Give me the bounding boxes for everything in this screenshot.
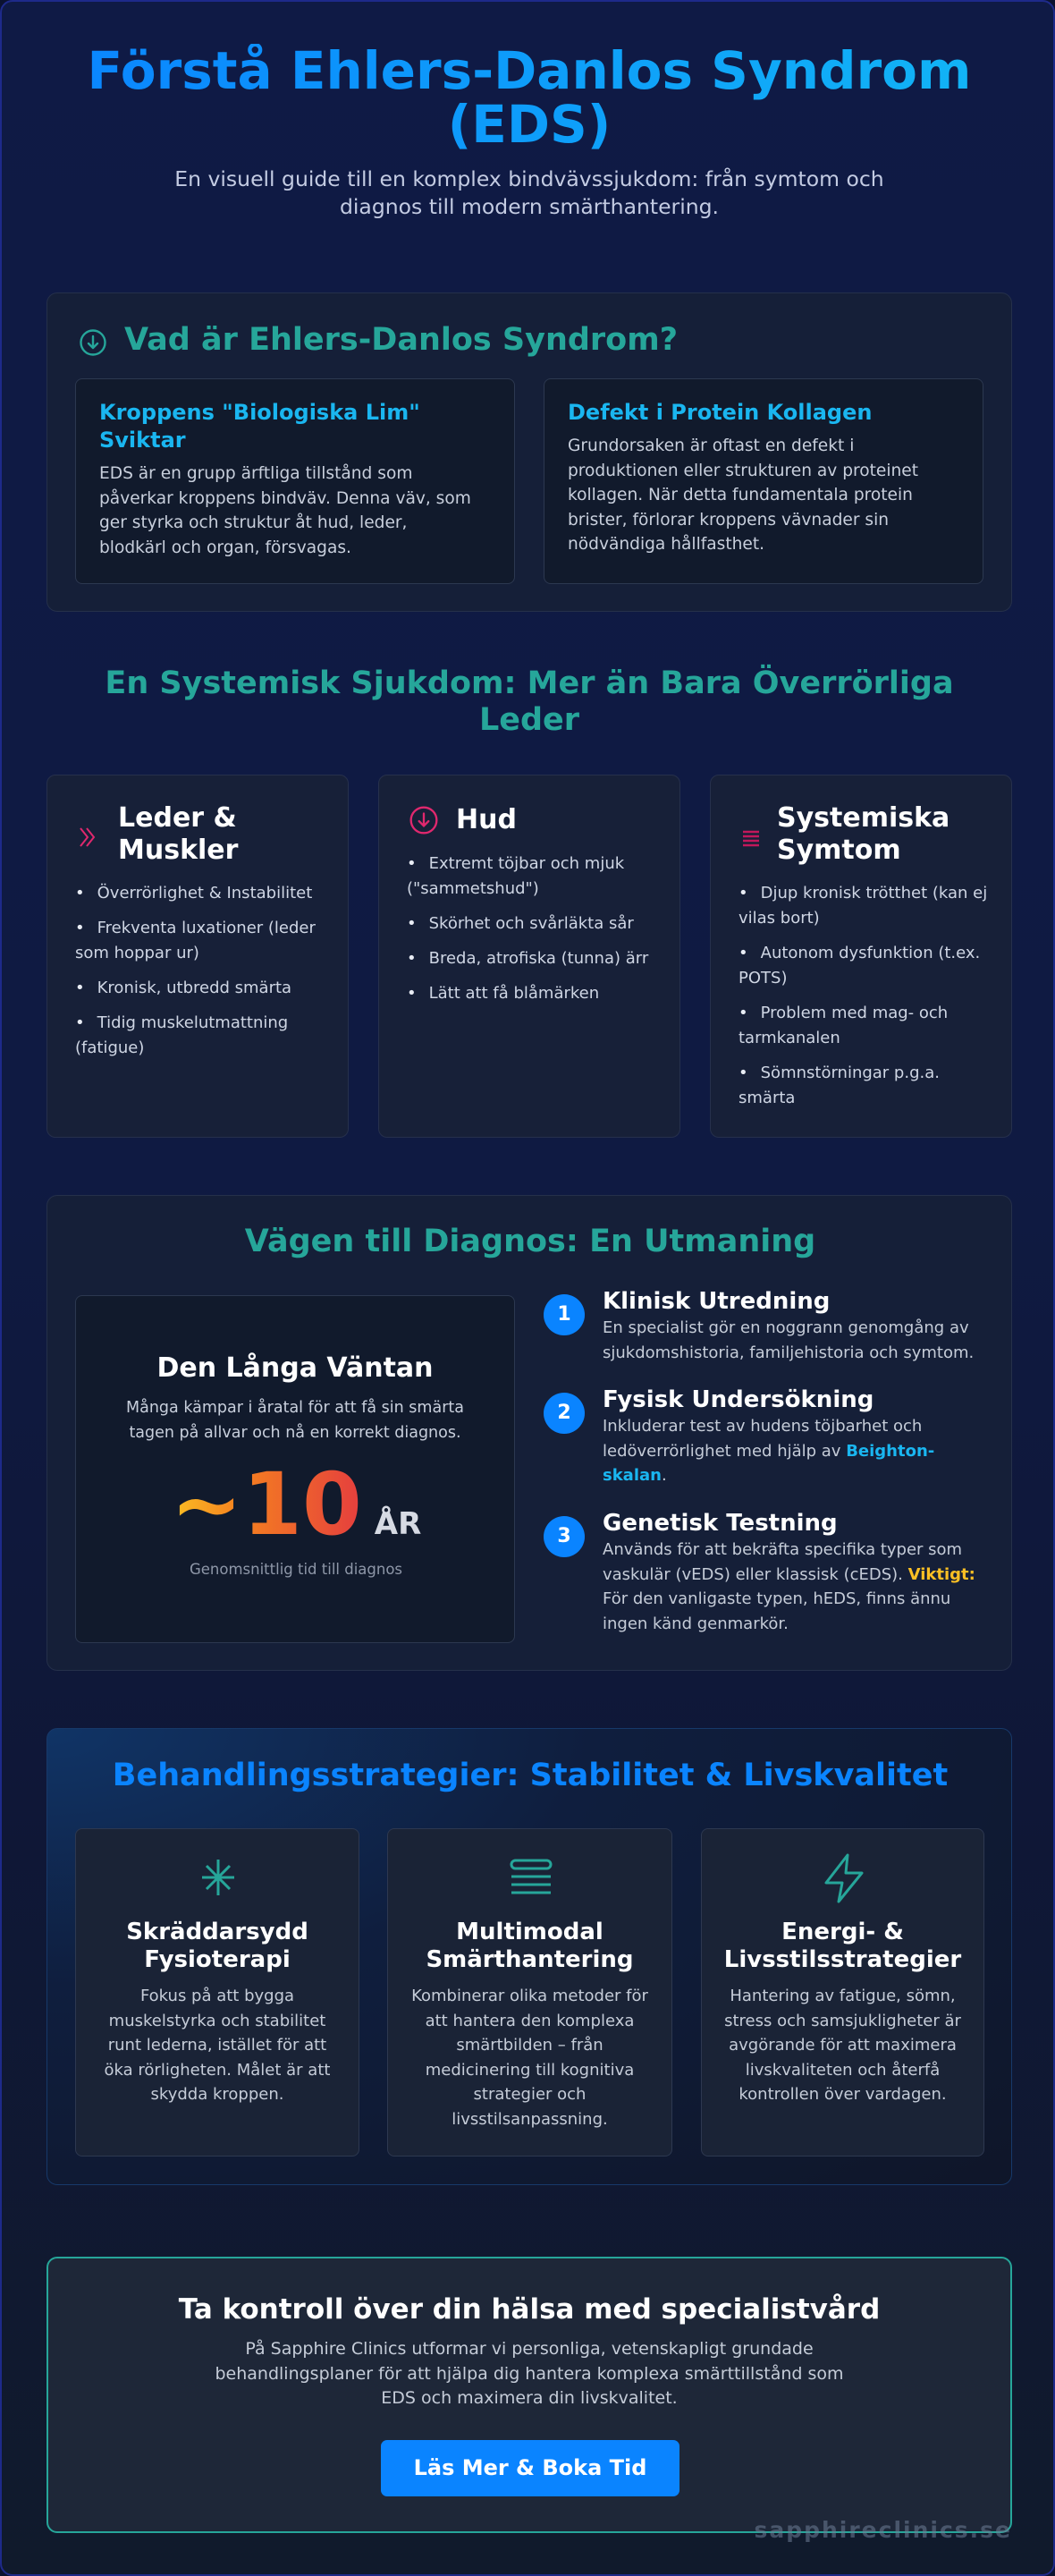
step 1: [544, 1288, 974, 1361]
list: systemic: Autonom dysfunktion (t.ex. POTS): [738, 944, 980, 987]
icon: circle arrow: [80, 329, 106, 356]
card: physiotherapy: [75, 1828, 359, 2157]
list: systemic: Sömnstörningar p.g.a. smärta: [738, 1063, 940, 1107]
step 2: 2: [557, 1402, 571, 1424]
step 3: Används för att bekräfta specifika typer som vaskulär (vEDS) eller klassisk (cEDS). Viktigt: För den vanligaste typen, hEDS, finns ännu ingen känd genmarkör.: [603, 1540, 975, 1633]
card: multimodal: [387, 1828, 672, 2157]
step 1: Klinisk Utredning: [603, 1288, 830, 1315]
heading: systemic disease: En Systemisk Sjukdom: Mer än Bara Överrörliga Leder: [105, 665, 954, 738]
panel: diagnosis: [46, 1195, 1012, 1671]
list: skin: Skörhet och svårläkta sår: [429, 914, 634, 933]
icon: lines: [743, 830, 759, 846]
subtitle: En visuell guide till en komplex bindvävssjukdom: från symtom och diagnos till modern smärthantering.: [174, 166, 884, 219]
card: energy: Hantering av fatigue, sömn, stress och samsjukligheter är avgörande för att maximera livskvaliteten och återfå kontrollen över vardagen.: [724, 1987, 961, 2104]
list: skin: Breda, atrofiska (tunna) ärr: [429, 949, 648, 968]
card: physiotherapy: Skräddarsydd Fysioterapi: [126, 1919, 308, 1973]
card: long wait: Många kämpar i åratal för att få sin smärta tagen på allvar och nå en korrekt diagnos.: [126, 1399, 464, 1442]
icon: double chevron: [80, 827, 95, 847]
card: multimodal: Kombinerar olika metoder för att hantera den komplexa smärtbilden – från medicinering till kognitiva strategier och livsstilsanpassning.: [411, 1987, 648, 2129]
list: skin: [407, 854, 649, 1003]
list: joints: Tidig muskelutmattning (fatigue): [75, 1013, 288, 1057]
panel: what is EDS: [46, 292, 1012, 612]
list: joints: Överrörlighet & Instabilitet: [97, 884, 312, 902]
card: long wait: Den Långa Väntan: [156, 1352, 434, 1384]
card: biological glue: Kroppens "Biologiska Lim" Sviktar: [99, 400, 420, 453]
CTA heading: Ta kontroll över din hälsa med specialistvård: [179, 2293, 880, 2326]
heading: diagnosis: Vägen till Diagnos: En Utmaning: [245, 1224, 815, 1259]
heading: treatment: Behandlingsstrategier: Stabilitet & Livskvalitet: [113, 1758, 948, 1793]
list: joints: Kronisk, utbredd smärta: [97, 979, 291, 997]
button: Läs Mer & Boka Tid: [414, 2455, 646, 2480]
panel: skin: [378, 775, 680, 1138]
CTA panel: [46, 2257, 1012, 2533]
panel: treatment: [46, 1728, 1012, 2185]
list: joints: [75, 884, 316, 1057]
step 3: [544, 1510, 975, 1633]
icon: stack: [510, 1859, 553, 1894]
card: energy: [701, 1828, 984, 2157]
icon: circle arrow pink: [409, 807, 438, 834]
step 1: En specialist gör en noggrann genomgång av sjukdomshistoria, familjehistoria och symtom.: [603, 1318, 974, 1361]
card: long wait: Genomsnittlig tid till diagnos: [190, 1561, 402, 1578]
card: collagen defect: [544, 378, 983, 584]
step 2: [544, 1386, 934, 1485]
card: biological glue: EDS är en grupp ärftliga tillstånd som påverkar kroppens bindväv. Denna väv, som ger styrka och struktur åt hud, leder, blodkärl och organ, försvagas.: [99, 464, 471, 557]
panel: joints & muscles: [46, 775, 349, 1138]
list: joints: Frekventa luxationer (leder som hoppar ur): [75, 919, 316, 962]
step 1: 1: [557, 1303, 571, 1326]
list: systemic: Djup kronisk trötthet (kan ej vilas bort): [738, 884, 987, 928]
icon: lightning: [824, 1853, 864, 1903]
panel: skin: Hud: [456, 804, 517, 835]
list: skin: Lätt att få blåmärken: [429, 984, 599, 1003]
CTA text: På Sapphire Clinics utformar vi personliga, vetenskapligt grundade behandlingsplaner för att hjälpa dig hantera komplexa smärttillstånd som EDS och maximera din livskvalitet.: [215, 2339, 844, 2408]
list: skin: Extremt töjbar och mjuk ("sammetshud"): [407, 854, 624, 898]
panel: joints & muscles: Leder & Muskler: [118, 802, 238, 866]
stat: ~10 years: ~10 ÅR: [171, 1454, 421, 1555]
card: physiotherapy: Fokus på att bygga muskelstyrka och stabilitet runt lederna, istället för att öka rörligheten. Målet är att skydda kroppen.: [105, 1987, 330, 2104]
panel: systemic symptoms: Systemiska Symtom: [777, 802, 950, 866]
card: biological glue: [75, 378, 515, 584]
panel: systemic symptoms: [710, 775, 1012, 1138]
title: Förstå Ehlers-Danlos Syndrom (EDS): [88, 40, 971, 155]
card: energy: Energi- & Livsstilsstrategier: [724, 1919, 961, 1973]
card: collagen defect: Defekt i Protein Kollagen: [568, 400, 872, 425]
step 2: Inkluderar test av hudens töjbarhet och ledöverrörlighet med hjälp av Beighton-skalan.: [603, 1417, 934, 1485]
list: systemic: Problem med mag- och tarmkanalen: [738, 1004, 948, 1047]
step 2: Fysisk Undersökning: [603, 1386, 874, 1413]
watermark: sapphireclinics.se: [754, 2517, 1012, 2543]
step 3: 3: [557, 1525, 571, 1547]
heading: Vad är EDS: Vad är Ehlers-Danlos Syndrom?: [124, 322, 678, 358]
card: long wait: [75, 1295, 515, 1643]
icon: asterisk: [202, 1860, 234, 1895]
card: multimodal: Multimodal Smärthantering: [426, 1919, 634, 1973]
list: systemic: [738, 884, 987, 1107]
card: collagen defect: Grundorsaken är oftast en defekt i produktionen eller strukturen av proteinet kollagen. När detta fundamentala protein brister, förlorar kroppens vävnader sin nödvändiga hållfasthet.: [568, 436, 918, 554]
step 3: Genetisk Testning: [603, 1510, 838, 1537]
button: [381, 2440, 679, 2496]
